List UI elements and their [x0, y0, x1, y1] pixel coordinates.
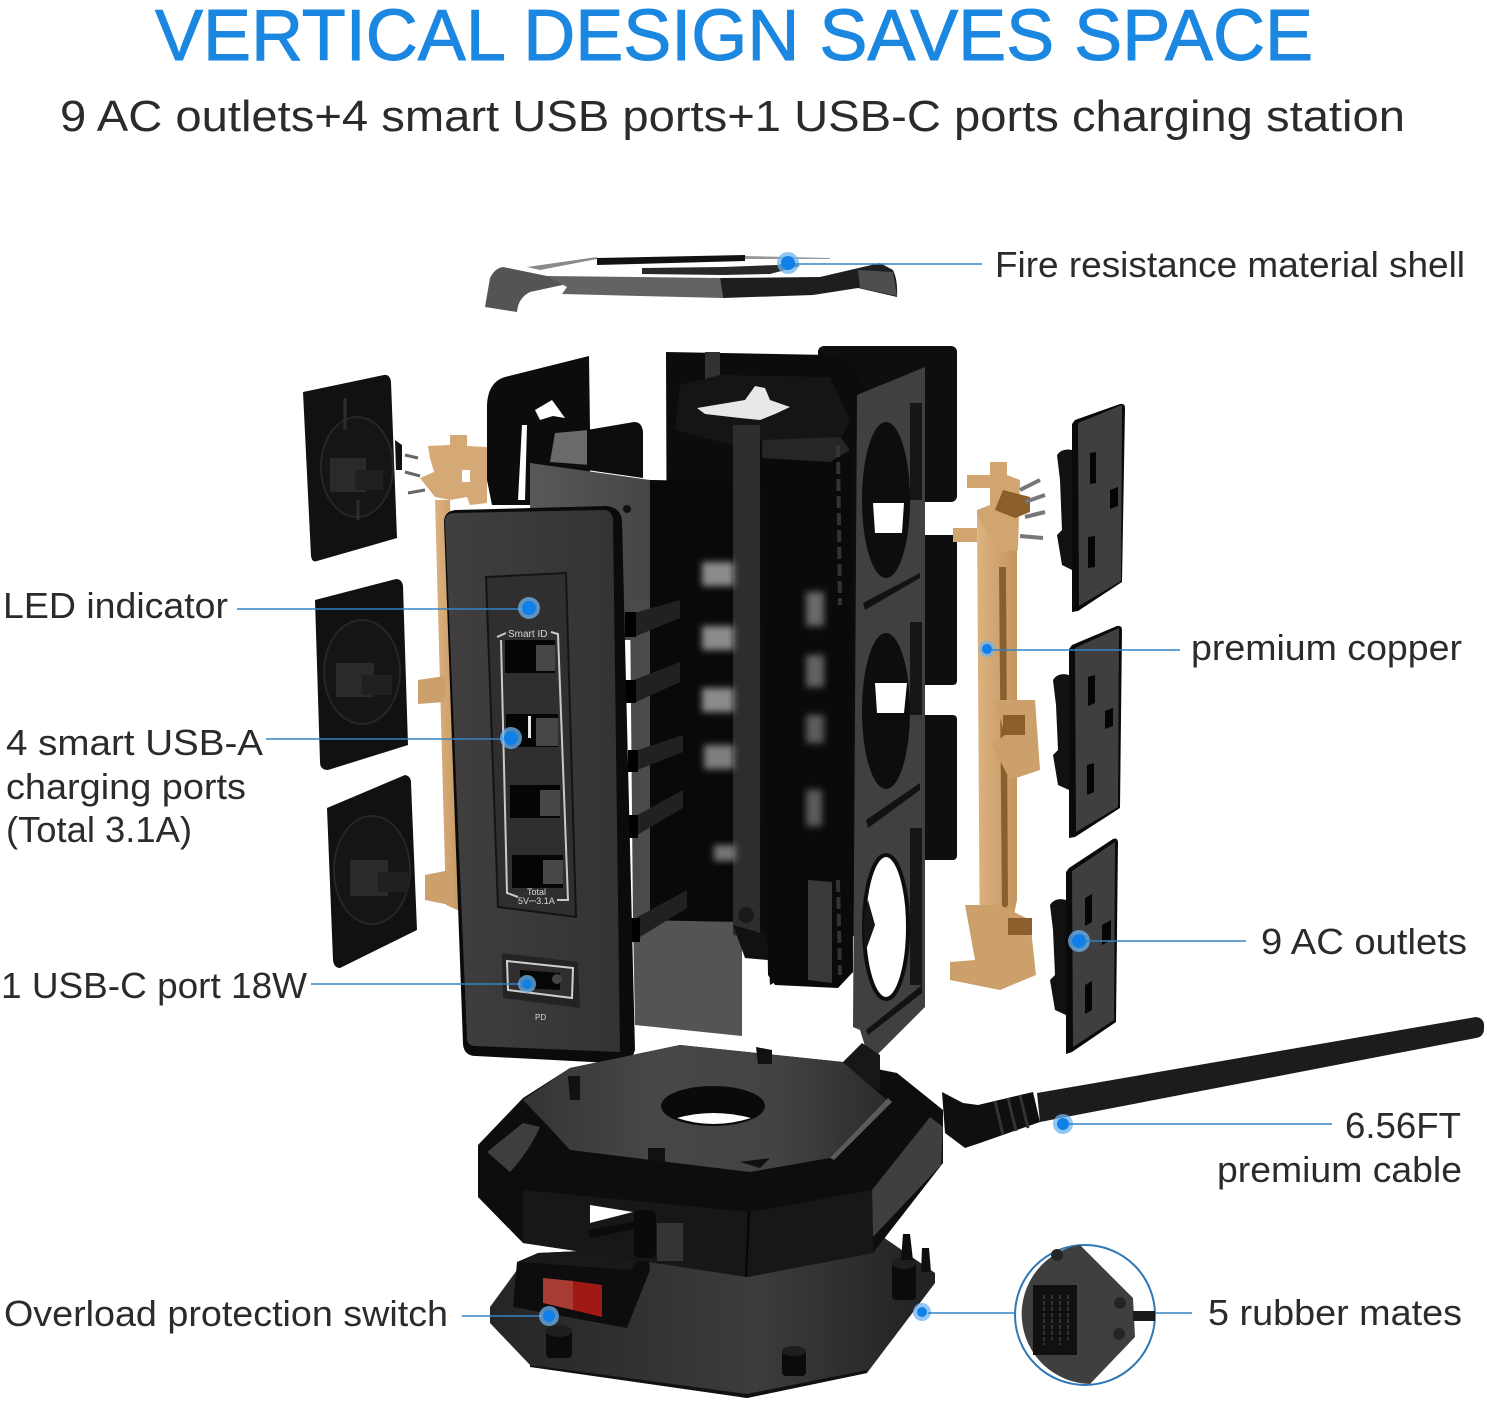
left copper bar — [405, 435, 487, 912]
right outlet modules — [1050, 404, 1125, 1054]
callout: AC outlets — [1068, 921, 1467, 962]
rubber feet inset — [1015, 1245, 1155, 1385]
inner tower back — [487, 352, 864, 1036]
callout: cable — [1053, 1105, 1462, 1190]
callout: USB-C port: 1 USB-C port 18W — [1, 965, 307, 1006]
USB charging panel: Smart ID — [508, 629, 547, 640]
callout: USB-A ports: (Total 3.1A) — [6, 809, 192, 850]
callout: rubber mates — [913, 1292, 1462, 1333]
top shell — [485, 255, 897, 312]
callout: cable: 6.56FT — [1345, 1105, 1461, 1146]
rear modules behind frame — [818, 346, 957, 860]
tower base — [478, 1043, 943, 1277]
callout: USB-A ports: charging ports — [6, 766, 246, 807]
callout: AC outlets: 9 AC outlets — [1261, 921, 1467, 962]
callout: overload switch: Overload protection switch — [4, 1293, 448, 1334]
callout: rubber mates: 5 rubber mates — [1208, 1292, 1462, 1333]
callout: USB-A ports: 4 smart USB-A — [6, 722, 263, 763]
USB charging panel: PD — [535, 1013, 546, 1022]
switch housing — [490, 1234, 935, 1398]
USB charging panel: 5V⎓3.1A — [518, 896, 555, 906]
left outlet modules — [303, 375, 417, 968]
callout: LED indicator — [3, 585, 540, 626]
callout: premium copper: premium copper — [1191, 627, 1462, 668]
black centre column — [760, 437, 853, 988]
callout: fire resistance shell — [777, 244, 1465, 285]
callout: LED indicator: LED indicator — [3, 585, 228, 626]
side frame — [853, 367, 925, 1062]
callout: cable: premium cable — [1217, 1149, 1462, 1190]
USB charging panel: Total — [527, 887, 546, 897]
subtitle: 9 AC outlets+4 smart USB ports+1 USB-C ports charging station — [60, 92, 1405, 141]
callout: USB-C port — [1, 965, 536, 1006]
right copper bar — [950, 462, 1045, 990]
USB charging panel — [444, 506, 635, 1064]
callout: USB-A ports — [6, 722, 522, 850]
callout: premium copper — [979, 627, 1462, 668]
callout: fire resistance shell: Fire resistance material shell — [995, 244, 1465, 285]
power cable — [942, 1017, 1484, 1148]
